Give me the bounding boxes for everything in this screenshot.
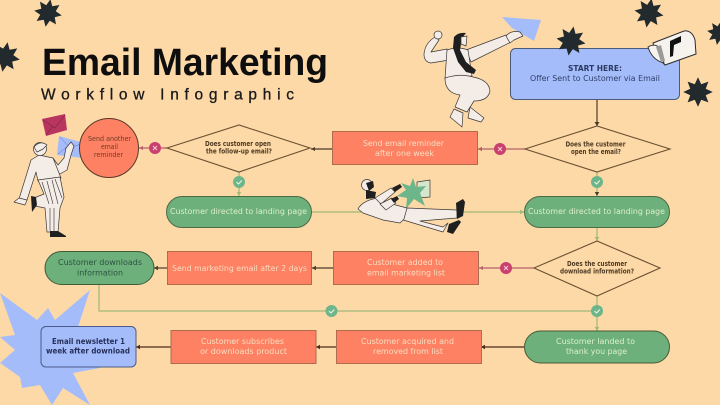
green pill: customer downloads information bbox=[45, 252, 154, 284]
decision diamond: open the email bbox=[525, 126, 670, 172]
decision diamond: download information: download information? bbox=[560, 268, 634, 276]
green pill: directed to landing page, right: Customer directed to landing page bbox=[528, 207, 665, 216]
decision diamond: open the email: Does the customer bbox=[566, 140, 626, 148]
red box: added to email marketing list: email marketing list bbox=[367, 268, 445, 278]
illustration: reclining woman with laptop bbox=[358, 178, 465, 234]
green pill: customer landed to thank you page bbox=[524, 331, 670, 363]
circle: send another email reminder: Send another bbox=[88, 135, 131, 143]
red box: send marketing email bbox=[168, 252, 312, 284]
green pill: customer downloads information: Customer downloads bbox=[58, 258, 142, 267]
red box: send email reminder bbox=[332, 132, 478, 164]
icon: no marker, open email bbox=[494, 143, 506, 155]
start box bbox=[510, 48, 680, 100]
circle: send another email reminder: reminder bbox=[94, 151, 123, 159]
decorative star right edge bbox=[705, 19, 720, 47]
blue box: email newsletter: week after download bbox=[46, 346, 130, 356]
green pill: customer landed to thank you page: thank you page bbox=[566, 347, 627, 356]
red box: added to email marketing list bbox=[334, 252, 478, 284]
illustration: jumping woman with envelope bbox=[424, 17, 541, 127]
blue starburst background bbox=[0, 290, 110, 405]
icon: no marker, follow-up email bbox=[149, 142, 161, 154]
red box: send marketing email: Send marketing email after 2 days bbox=[172, 264, 307, 273]
circle: send another email reminder bbox=[80, 118, 138, 178]
decision diamond: open follow-up email: the follow-up email? bbox=[206, 148, 272, 156]
red box: send email reminder: Send email reminder bbox=[363, 139, 445, 148]
red box: customer acquired bbox=[336, 330, 482, 364]
red box: customer acquired: Customer acquired and bbox=[361, 337, 454, 346]
green pill: directed to landing page, left bbox=[166, 196, 312, 228]
green pill: customer downloads information: information bbox=[77, 268, 123, 278]
decorative star left edge bbox=[0, 40, 22, 74]
illustration: man holding envelopes bbox=[14, 114, 84, 237]
decision diamond: open the email: open the email? bbox=[571, 148, 621, 156]
decorative star top left bbox=[32, 0, 64, 29]
icon: yes marker, download bbox=[591, 305, 603, 317]
green pill: customer landed to thank you page: Customer landed to bbox=[556, 337, 635, 346]
green pill: directed to landing page, right bbox=[524, 196, 670, 228]
title: Email Marketing bbox=[42, 42, 328, 84]
decision diamond: open follow-up email bbox=[167, 125, 310, 172]
blue box: email newsletter bbox=[41, 326, 136, 367]
red box: customer subscribes: Customer subscribes bbox=[201, 337, 284, 346]
circle: send another email reminder: email bbox=[101, 143, 118, 151]
icon: yes marker, follow-up email bbox=[233, 176, 245, 188]
decision diamond: open follow-up email: Does customer open bbox=[205, 140, 271, 148]
red box: send email reminder: after one week bbox=[375, 149, 434, 158]
star over start box bbox=[554, 24, 588, 58]
start box: START HERE: bbox=[568, 64, 622, 73]
decision diamond: download information bbox=[534, 241, 660, 296]
red box: added to email marketing list: Customer added to bbox=[367, 258, 443, 267]
red box: customer acquired: removed from list bbox=[373, 347, 443, 356]
icon: mailbox bbox=[648, 31, 696, 65]
subtitle: Workflow Infographic bbox=[41, 86, 294, 104]
blue box: email newsletter: Email newsletter 1 bbox=[52, 337, 125, 346]
star beside start box bbox=[683, 77, 713, 107]
green pill: directed to landing page, left: Customer directed to landing page bbox=[170, 207, 307, 216]
red box: customer subscribes bbox=[171, 330, 316, 364]
connector arrows bbox=[99, 99, 600, 349]
icon: yes marker, bottom line bbox=[326, 305, 338, 317]
red box: customer subscribes: or downloads product bbox=[200, 347, 287, 356]
decision diamond: download information: Does the customer bbox=[567, 260, 628, 268]
start box: Offer Sent to Customer via Email bbox=[530, 74, 660, 83]
icon: no marker, download bbox=[500, 262, 512, 274]
decorative star top right bbox=[632, 0, 666, 30]
icon: yes marker, open email bbox=[591, 176, 603, 188]
